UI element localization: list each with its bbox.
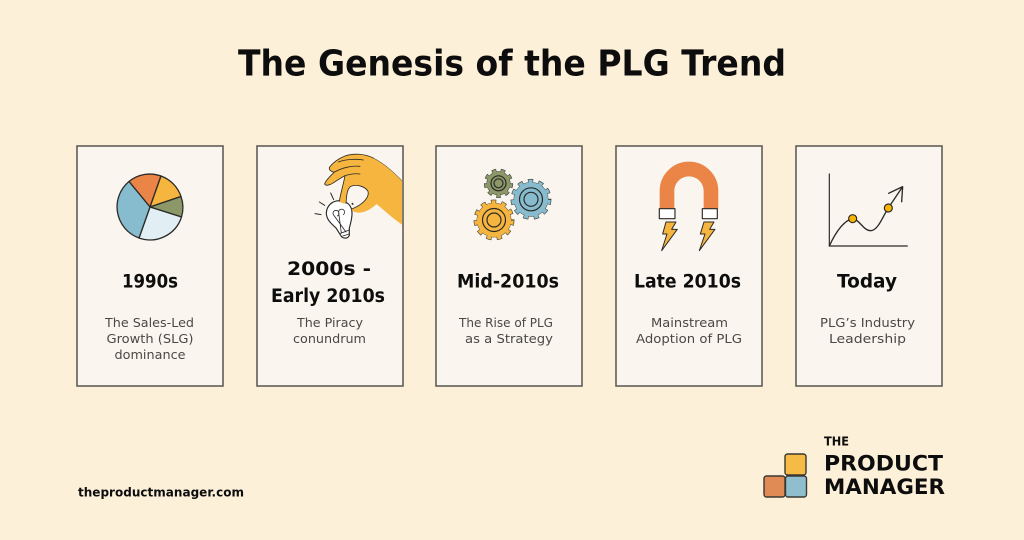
heading: 1990s: 1990s xyxy=(122,272,178,292)
logo wordmark: MANAGER xyxy=(824,475,945,499)
heading: 2000s - Early 2010s xyxy=(271,259,385,307)
footer website: theproductmanager.com xyxy=(78,484,244,500)
text: Today description xyxy=(820,316,915,347)
text: Late 2010s description xyxy=(636,316,742,347)
heading: Mid-2010s: Mid-2010s xyxy=(457,272,559,292)
logo wordmark: THE xyxy=(824,435,849,449)
panel: Mid-2010s xyxy=(436,146,582,386)
title: The Genesis of the PLG Trend xyxy=(238,44,786,84)
text: Mid-2010s description: as a Strategy xyxy=(465,332,553,347)
icon: yellow gear xyxy=(476,202,512,238)
text: Today description: Leadership xyxy=(829,332,906,347)
panel: 2000s - Early 2010s xyxy=(257,146,403,386)
icon: pie chart xyxy=(117,174,183,240)
heading: Today: Today xyxy=(837,272,897,292)
logo xyxy=(764,435,945,499)
text: Late 2010s description: Adoption of PLG xyxy=(636,332,742,347)
icon: hand holding light bulb xyxy=(315,154,402,238)
text: piracy description: conundrum xyxy=(293,332,366,347)
text: piracy description: The Piracy xyxy=(296,316,363,331)
text: 1990s description xyxy=(104,316,194,363)
text: 1990s description: Growth (SLG) xyxy=(106,332,194,347)
heading: 2000s - Early 2010s: 2000s - xyxy=(287,259,371,280)
heading: 2000s - Early 2010s: Early 2010s xyxy=(271,286,385,307)
icon: magnet xyxy=(659,169,717,251)
panel: Late 2010s xyxy=(616,146,762,386)
text: Late 2010s description: Mainstream xyxy=(651,316,728,331)
text: Today description: PLG’s Industry xyxy=(820,316,915,331)
text: Mid-2010s description: The Rise of PLG xyxy=(458,316,553,331)
logo wordmark: PRODUCT xyxy=(824,452,944,476)
icon: blue gear xyxy=(513,181,549,218)
icon: olive gear xyxy=(486,171,511,196)
panel: Today xyxy=(796,146,942,386)
text: 1990s description: The Sales-Led xyxy=(104,316,194,331)
text: Mid-2010s description xyxy=(458,316,553,347)
logo wordmark xyxy=(824,435,945,499)
heading: Late 2010s: Late 2010s xyxy=(634,272,741,292)
icon: growth line chart xyxy=(829,174,907,246)
panel: 1990s xyxy=(77,146,223,386)
text: piracy description xyxy=(293,316,366,347)
text: 1990s description: dominance xyxy=(114,348,186,363)
icon: gears xyxy=(476,171,549,238)
icon: logo blocks xyxy=(764,454,806,497)
